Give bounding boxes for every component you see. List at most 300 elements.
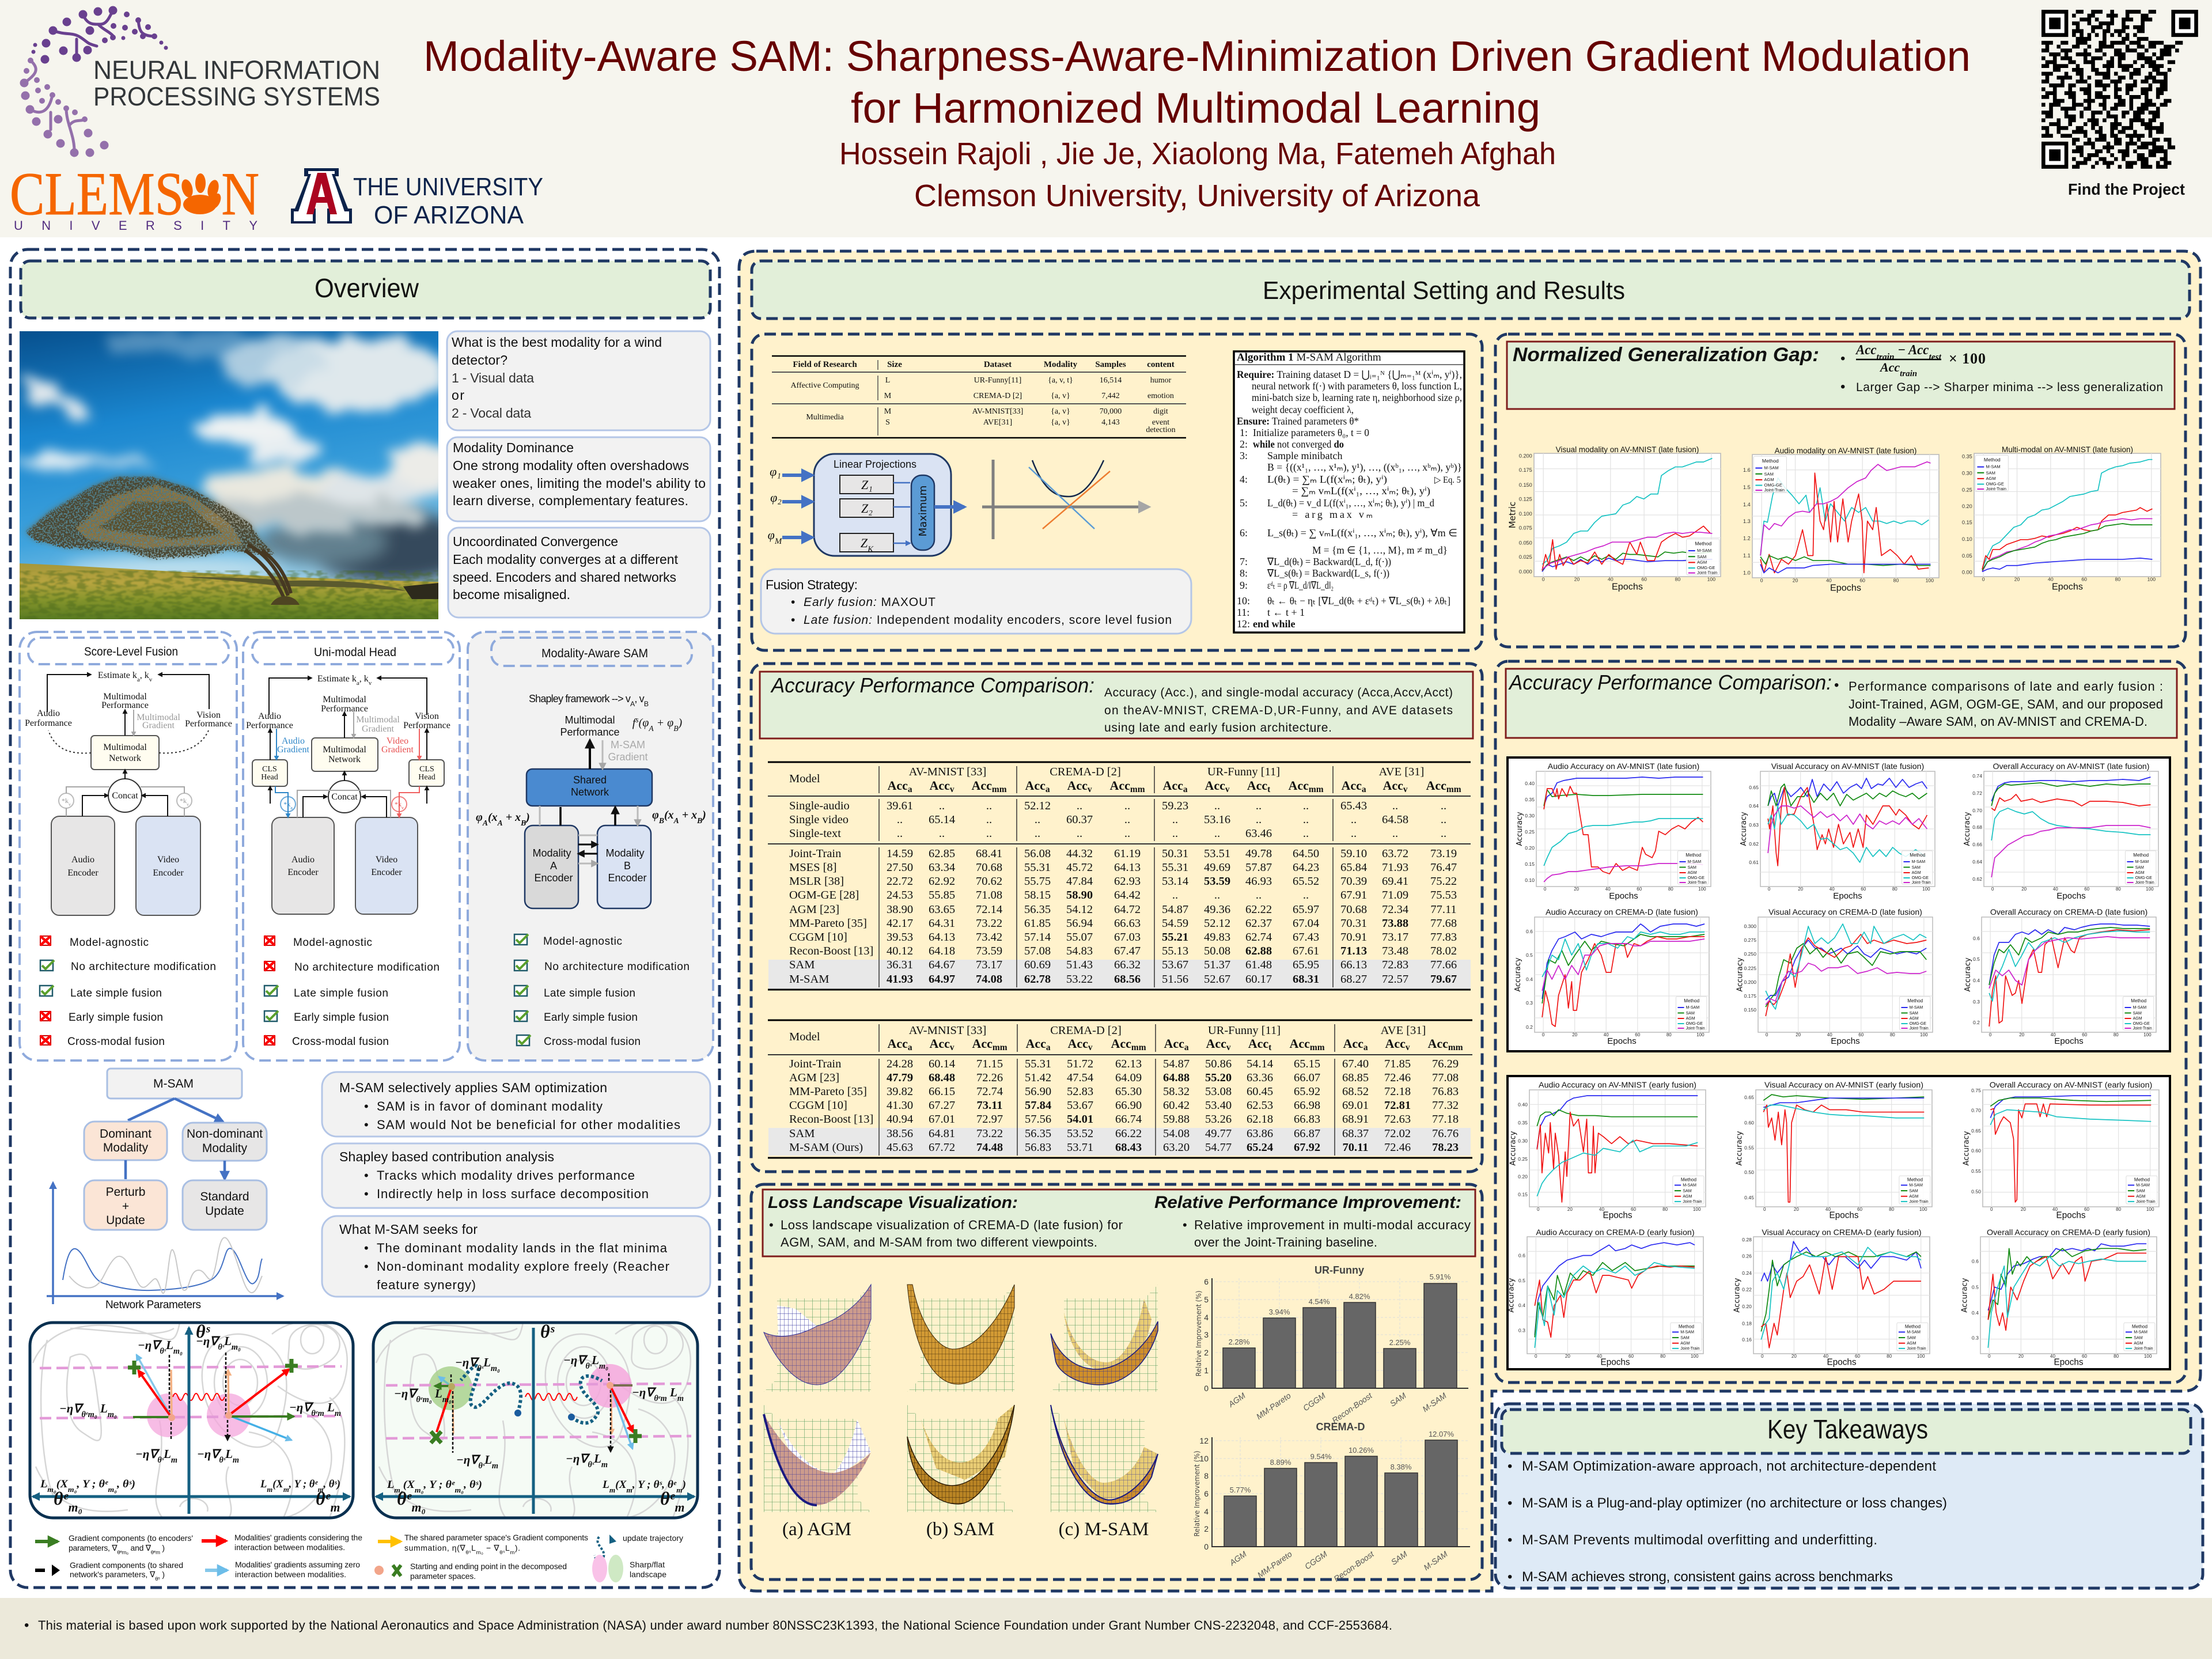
algorithm box: Algorithm 1 M-SAM Algorithm [1237,351,1381,363]
chart: visual accuracy CREMA-D late [1736,907,1933,1046]
chart: audio accuracy AV-MNIST late: 0.35 [1525,797,1535,802]
checklist: uni-modal head [264,936,440,1048]
logo: Clemson: CLEMSON [10,160,259,228]
table: early fusion accuracy: Acca [1343,1036,1368,1052]
green caption: Performance comparisons of late and early fusion : [1849,679,2163,694]
table: late fusion accuracy: Accmm [971,778,1007,794]
algorithm box: neural network f(·) with parameters θ, loss function L, [1252,380,1462,392]
dataset table: UR-Funny[11] [974,376,1021,385]
dataset table: 7,442 [1101,392,1120,400]
table: early fusion accuracy: 53.71 [1067,1141,1093,1154]
table: early fusion accuracy: 51.72 [1067,1058,1093,1070]
algorithm box: Sample minibatch [1267,450,1342,461]
table: early fusion accuracy: 65.92 [1294,1085,1320,1098]
table: late fusion accuracy: 46.93 [1245,875,1272,888]
algorithm box: Initialize parameters θ₀, t = 0 [1253,427,1369,438]
chart: visual accuracy CREMA-D late: Epochs [1831,1036,1860,1046]
dataset table: humor [1150,376,1172,385]
bar chart: CREMA-D: 5.77% [1230,1486,1251,1494]
chart: overall accuracy CREMA-D early: Epochs [2054,1357,2084,1367]
chart: visual accuracy CREMA-D early: Accuracy [1733,1278,1742,1313]
green caption: • [769,1218,774,1232]
table: early fusion accuracy: 52.83 [1067,1085,1093,1098]
diagram: linear projections maxout: ZK [861,536,874,554]
table: late fusion accuracy: 64.67 [929,959,955,971]
table: early fusion accuracy: 40.94 [887,1113,913,1126]
table: late fusion accuracy: 42.17 [887,917,913,930]
table: late fusion accuracy: Accv [1067,778,1092,794]
table: late fusion accuracy: AGM [23] [789,903,839,916]
green caption: Relative improvement in multi-modal accuracy [1194,1218,1471,1232]
table: late fusion accuracy: 56.94 [1066,917,1093,930]
chart: audio accuracy AV-MNIST late: 0.25 [1525,829,1535,835]
table: early fusion accuracy: Accmm [1111,1036,1146,1052]
diagram: linear projections maxout: φ₂ [770,490,782,505]
table: early fusion accuracy: 63.36 [1247,1071,1273,1084]
diagram: uni-modal head: Gradient [362,724,395,734]
table: late fusion accuracy: .. [1303,889,1309,902]
green caption: • [1183,1218,1187,1232]
bar chart: UR-Funny: Recon-Boost [1330,1391,1374,1425]
chart: audio accuracy AV-MNIST late: Accuracy [1516,812,1524,846]
diagram: score-level fusion: Multimodal [137,713,180,722]
chart: overall accuracy CREMA-D late: Accuracy [1964,957,1972,992]
chart: audio accuracy CREMA-D late: 0.2 [1526,1024,1533,1030]
diagram: SAM on both modalities: −η∇θˢLm [197,1447,239,1465]
green caption: AGM, SAM, and M-SAM from two different viewpoints. [781,1235,1097,1249]
chart: visual accuracy CREMA-D early: 0.28 [1742,1237,1752,1243]
dataset table: emotion [1147,392,1174,400]
chart: audio modality gap: 1.4 [1743,502,1751,507]
bar chart: UR-Funny: 3 [1204,1330,1209,1339]
dataset table: Modality [1044,360,1078,369]
table: late fusion accuracy: .. [986,813,992,826]
algorithm box: 8: [1240,567,1248,579]
legend: gradient diagram key: Gradient components (to shared [70,1560,183,1570]
checklist: modality-aware SAM [514,934,690,1048]
bar chart: UR-Funny: 4.82% [1349,1292,1370,1301]
table: early fusion accuracy: AGM [23] [789,1071,839,1084]
algorithm box: = ∑ₘ vₘL(f(xⁱ₁, …, xⁱₘ; θₜ), yⁱ) [1292,485,1430,497]
table: late fusion accuracy: .. [1392,800,1398,812]
table: early fusion accuracy: 56.35 [1025,1127,1051,1140]
table: late fusion accuracy: Accv [1205,778,1230,794]
algorithm box: 9: [1240,579,1248,591]
diagram: SAM on both modalities: Lm₀(Xm₀, Y ; θᵉm₀, θˢ) [40,1478,135,1493]
legend: gradient diagram key: landscape [630,1570,666,1579]
bar chart: CREMA-D: MM-Pareto [1256,1549,1294,1580]
diagram: score-level fusion [25,671,232,915]
chart: overall accuracy CREMA-D late: 0.3 [1973,999,1980,1005]
dataset table: {a, v} [1051,418,1070,427]
chart: visual accuracy CREMA-D late: 0.150 [1744,1007,1756,1013]
flowchart: M-SAM branching: Update [205,1205,244,1218]
panel title [252,638,453,664]
algorithm box: 10: [1237,595,1250,607]
affiliations: Clemson University, University of Arizona [914,179,1480,213]
flowchart: M-SAM branching: Modality [202,1142,248,1155]
chart: audio modality gap: Epochs [1830,583,1861,593]
table: early fusion accuracy: 76.83 [1432,1085,1459,1098]
diagram: M-SAM trajectories: Lm₀(Xm₀, Y ; θᵉm₀, θˢ) [387,1479,482,1494]
table: early fusion accuracy: 76.76 [1432,1127,1459,1140]
dataset table: 4,143 [1101,418,1120,427]
chart: visual modality gap: 0.150 [1519,482,1532,488]
text box: selective SAM: • [364,1118,369,1132]
table: late fusion accuracy: 44.32 [1066,847,1093,860]
table: late fusion accuracy: 62.85 [929,847,955,860]
green caption [1507,342,2175,409]
bar chart: CREMA-D: Recon-Boost [1332,1549,1376,1584]
table: early fusion accuracy: 49.77 [1205,1127,1232,1140]
chart: overall accuracy AV-MNIST late: 0.62 [1972,876,1982,882]
table: early fusion accuracy: 56.90 [1025,1085,1051,1098]
table: late fusion accuracy: 63.65 [929,903,955,916]
flowchart: M-SAM branching: M-SAM [153,1077,194,1090]
table: late fusion accuracy: 72.34 [1382,903,1408,916]
heading [752,261,2190,319]
chart: audio accuracy AV-MNIST early: 0.20 [1518,1173,1528,1179]
table: early fusion accuracy: MM-Pareto [35] [789,1085,867,1098]
text box: what M-SAM seeks [322,1216,710,1297]
table: late fusion accuracy: Acct [1247,778,1270,794]
table: late fusion accuracy: 40.12 [887,945,913,957]
text box: selective SAM: SAM would Not be beneficial for other modalities [377,1118,680,1132]
table: early fusion accuracy: 50.86 [1205,1058,1232,1070]
chart: audio accuracy AV-MNIST late: 0.15 [1525,861,1535,867]
table: late fusion accuracy: 58.15 [1024,889,1051,902]
table: late fusion accuracy: 47.84 [1066,875,1093,888]
table: early fusion accuracy: 77.32 [1432,1099,1459,1112]
chart: overall accuracy CREMA-D late: 0.4 [1973,978,1980,983]
table: late fusion accuracy: .. [1256,889,1262,902]
table: late fusion accuracy: 76.47 [1430,861,1457,874]
algorithm box: 5: [1240,497,1248,509]
header band [0,0,2212,237]
chart: visual modality gap: 0.100 [1519,511,1532,517]
table: early fusion accuracy: 73.22 [976,1127,1003,1140]
chart: visual accuracy AV-MNIST early: Accuracy [1735,1131,1744,1166]
bar chart: CREMA-D: 8 [1204,1471,1209,1480]
diagram: uni-modal head: Multimodal [323,745,366,755]
surface: SAM top [907,1285,1014,1392]
diagram: SAM on both modalities: θˢ [196,1321,211,1342]
table: early fusion accuracy: 57.84 [1025,1099,1051,1112]
table: late fusion accuracy: 73.19 [1430,847,1457,860]
dataset table: Multimedia [806,413,844,422]
table: early fusion accuracy: 77.08 [1432,1071,1459,1084]
footer note: This material is based upon work supported by the National Aeronautics and Space Administration (NASA) under award number 80NSSC23K1393, the National Science Foundation under Grant Number CNS-2232048, and CCF-2553684. [38,1618,1392,1633]
table: early fusion accuracy: 72.02 [1384,1127,1411,1140]
chart: audio accuracy AV-MNIST early: Epochs [1603,1210,1633,1220]
green caption: Joint-Trained, AGM, OGM-GE, SAM, and our proposed [1849,697,2163,711]
table: late fusion accuracy: 52.67 [1204,973,1230,986]
chart: audio accuracy CREMA-D late: 0.3 [1526,1000,1533,1006]
chart: audio accuracy CREMA-D early: 0.6 [1518,1253,1525,1259]
bar chart: UR-Funny: 2 [1204,1348,1209,1357]
diagram: SAM on both modalities [30,1321,353,1518]
text box: wind detector question: 2 - Vocal data [452,406,531,421]
chart: visual accuracy AV-MNIST late: 0.63 [1749,822,1759,828]
text box: modality dominance [447,437,710,521]
bar chart: UR-Funny: 5.91% [1430,1272,1451,1281]
logo: NeurIPS: NEURAL INFORMATION [93,55,380,85]
chart: visual accuracy AV-MNIST early: 0.60 [1744,1120,1754,1126]
text box: fusion strategy: • [791,613,795,627]
table: late fusion accuracy: 49.36 [1204,903,1230,916]
algorithm box: θₜ ← θₜ − ηₜ [∇L_d(θₜ + εᵈₜ) + ∇L_s(θₜ) + λθₜ] [1267,595,1450,607]
logo: NeurIPS: PROCESSING SYSTEMS [93,82,380,111]
table: early fusion accuracy: 66.15 [929,1085,955,1098]
bar chart: CREMA-D: 0 [1204,1542,1209,1551]
chart: overall accuracy AV-MNIST late: Epochs [2056,891,2086,901]
diagram: SAM on both modalities: θᵉm₀ [54,1488,82,1514]
table: early fusion accuracy: Accv [929,1036,955,1052]
chart: overall accuracy AV-MNIST early: 0.65 [1971,1128,1981,1134]
diagram: score-level fusion: Gradient [142,721,175,730]
chart: visual modality gap: 0.075 [1519,525,1532,531]
diagram: uni-modal head: Head [418,773,435,782]
diagram: linear projections maxout: Z₂ [861,501,873,516]
table: late fusion accuracy: .. [1172,813,1178,826]
algorithm box: 1: [1240,427,1248,438]
table: early fusion accuracy: M-SAM (Ours) [789,1141,863,1154]
table: late fusion accuracy: 60.69 [1024,959,1051,971]
dataset table: {a, v} [1051,407,1070,416]
flowchart: M-SAM branching: Dominant [100,1127,151,1141]
surface: AGM top [764,1285,871,1392]
legend: gradient diagram key: update trajectory [623,1533,683,1543]
flowchart: M-SAM branching: Modality [103,1141,149,1154]
checklist: modality-aware SAM: Cross-modal fusion [544,1036,641,1048]
chart: audio accuracy CREMA-D early: 0.3 [1518,1327,1525,1333]
chart: visual accuracy CREMA-D early: 0.20 [1742,1304,1752,1309]
chart: audio accuracy CREMA-D early: Epochs [1601,1357,1630,1367]
table: early fusion accuracy: 58.32 [1163,1085,1190,1098]
chart: audio accuracy AV-MNIST early: 0.35 [1518,1120,1528,1126]
diagram: score-level fusion: Performance [101,700,149,710]
diagram: M-SAM trajectories: θˢ [540,1321,555,1342]
table: early fusion accuracy: 60.14 [929,1058,955,1070]
chart: visual accuracy AV-MNIST late: Accuracy [1740,812,1748,846]
diagram: score-level fusion: Performance [185,719,232,729]
diagram: uni-modal head: Estimate ka, kv [317,674,372,687]
chart: overall accuracy CREMA-D late: Epochs [2054,1036,2084,1046]
table: late fusion accuracy: .. [1441,800,1446,812]
table: early fusion accuracy: 64.88 [1163,1071,1190,1084]
table: late fusion accuracy: 56.35 [1024,903,1051,916]
table: early fusion accuracy: 51.42 [1025,1071,1051,1084]
diagram: uni-modal head: Encoder [371,868,402,877]
chart: audio accuracy CREMA-D late: Epochs [1607,1036,1637,1046]
chart: overall accuracy CREMA-D late: Overall Accuracy on CREMA-D (late fusion) [1990,907,2147,916]
table: late fusion accuracy: 24.53 [887,889,913,902]
diagram: M-SAM network: B [624,860,631,872]
bar chart: CREMA-D: CREMA-D [1316,1421,1365,1433]
checklist: uni-modal head: Early simple fusion [294,1012,389,1024]
table: late fusion accuracy: 53.59 [1204,875,1230,888]
legend: gradient diagram key: Sharp/flat [630,1560,665,1569]
table: late fusion accuracy: .. [1351,827,1357,840]
bar chart: CREMA-D: 12 [1199,1436,1209,1445]
table: late fusion accuracy: 49.83 [1204,931,1230,944]
table: late fusion accuracy: 73.17 [976,959,1002,971]
table: late fusion accuracy: .. [986,827,992,840]
table: early fusion accuracy: 68.85 [1342,1071,1369,1084]
chart: overall accuracy AV-MNIST early [1962,1081,2159,1220]
table: late fusion accuracy: Recon-Boost [13] [789,945,873,957]
chart: audio accuracy CREMA-D early: 0.4 [1518,1302,1525,1308]
table: late fusion accuracy: 53.51 [1204,847,1230,860]
chart: audio accuracy AV-MNIST late: Audio Accuracy on AV-MNIST (late fusion) [1548,762,1699,771]
chart: audio accuracy AV-MNIST early: 0.15 [1518,1192,1528,1198]
dataset table: S [885,418,890,427]
table: late fusion accuracy: 39.53 [887,931,913,944]
QR code [2041,10,2198,169]
bar chart: UR-Funny: 4 [1204,1313,1209,1322]
table: early fusion accuracy: 68.37 [1342,1127,1369,1140]
table: early fusion accuracy: 57.56 [1025,1113,1051,1126]
table: late fusion accuracy: 74.08 [976,973,1002,986]
table: late fusion accuracy: 57.14 [1024,931,1051,944]
table: late fusion accuracy: 65.52 [1293,875,1319,888]
chart: loss curves over network parameters: Network Parameters [105,1299,201,1311]
table: late fusion accuracy: 38.90 [887,903,913,916]
table: early fusion accuracy: SAM [789,1127,815,1140]
legend: gradient diagram key: network's parameters, ∇θˢ ) [70,1570,165,1582]
table: late fusion accuracy: 65.43 [1340,800,1367,812]
chart: audio accuracy AV-MNIST late: 0.30 [1525,813,1535,819]
chart: overall accuracy AV-MNIST late: 0.66 [1972,842,1982,847]
table: early fusion accuracy: 72.81 [1384,1099,1411,1112]
table: early fusion accuracy: 62.13 [1115,1058,1142,1070]
chart: audio accuracy CREMA-D late: Accuracy [1514,957,1522,992]
text box: fusion strategy [761,569,1191,634]
green caption [763,1190,1475,1256]
table rules: early fusion: AVE [31] [1381,1024,1426,1037]
text box: Shapley analysis [322,1143,710,1208]
table: late fusion accuracy: 53.22 [1066,973,1093,986]
table: late fusion accuracy: 64.97 [929,973,955,986]
table: early fusion accuracy: 67.72 [929,1141,955,1154]
table: late fusion accuracy: 62.78 [1024,973,1051,986]
algorithm box: L(θₜ) = ∑ₘ L(f(xⁱₘ; θₜ), yⁱ) [1267,474,1387,486]
table rules: late fusion: AVE [31] [1379,766,1424,778]
diagram: uni-modal head: Performance [321,704,368,714]
table: late fusion accuracy: Single video [789,813,849,826]
table: early fusion accuracy: 63.20 [1163,1141,1190,1154]
diagram: M-SAM network: φB(xA + xB) [652,809,706,825]
chart: overall accuracy CREMA-D late: 0.2 [1973,1020,1980,1025]
table rules: early fusion: Model [789,1031,820,1043]
chart: visual accuracy AV-MNIST late: 0.64 [1749,803,1759,809]
table: late fusion accuracy: 68.41 [976,847,1002,860]
takeaway bullets: M-SAM achieves strong, consistent gains across benchmarks [1522,1569,1893,1585]
diagram: linear projections maxout: φM [768,528,783,546]
chart: visual accuracy AV-MNIST early: 0.45 [1744,1195,1754,1200]
green caption: Accuracy Performance Comparison: [770,673,1094,697]
algorithm box: 2: [1240,438,1248,450]
table: late fusion accuracy: 72.57 [1382,973,1408,986]
table: late fusion accuracy: 58.90 [1066,889,1093,902]
flowchart: M-SAM branching: Standard [200,1190,249,1203]
table: early fusion accuracy: 60.45 [1247,1085,1273,1098]
chart: visual accuracy CREMA-D late: Accuracy [1736,957,1745,992]
legend: gradient diagram key: The shared parameter space's Gradient components [404,1533,588,1542]
card: loss landscapes and relative improvement [751,1184,1482,1584]
text box: fusion strategy: Early fusion: MAXOUT [804,596,935,609]
table: early fusion accuracy [789,1036,1463,1154]
table: early fusion accuracy: Accv [1385,1036,1410,1052]
takeaway bullets: M-SAM Prevents multimodal overfitting and underfitting. [1522,1532,1877,1548]
table rules: late fusion: CREMA-D [2] [1050,766,1121,778]
table: late fusion accuracy: 77.68 [1430,917,1457,930]
table: early fusion accuracy: 41.30 [887,1099,913,1112]
surface: SAM bottom [907,1405,1014,1512]
table: late fusion accuracy: .. [1392,827,1398,840]
dataset table: AVE[31] [983,418,1012,427]
bar chart: UR-Funny: 3.94% [1269,1308,1290,1316]
green caption: Normalized Generalization Gap: [1513,344,1819,366]
green caption: Larger Gap --> Sharper minima --> less generalization [1856,381,2163,394]
table: late fusion accuracy: 73.42 [976,931,1002,944]
chart: audio accuracy CREMA-D late: 0.4 [1526,976,1533,982]
table: late fusion accuracy: 55.75 [1024,875,1051,888]
text box: fusion strategy: Fusion Strategy: [766,577,858,592]
diagram: uni-modal head: Vision [415,711,439,721]
table: late fusion accuracy: 66.32 [1114,959,1141,971]
dataset table: L [885,376,890,385]
table: late fusion accuracy: 52.12 [1024,800,1051,812]
diagram: score-level fusion: Vision [196,710,221,720]
chart: audio modality gap: 1.0 [1743,570,1751,576]
table: late fusion accuracy: 67.47 [1114,945,1141,957]
table: late fusion accuracy: Accmm [1288,778,1324,794]
dataset table [772,356,1186,438]
table: late fusion accuracy: 70.62 [976,875,1002,888]
table: late fusion accuracy: 71.08 [976,889,1002,902]
table: early fusion accuracy: 38.56 [887,1127,913,1140]
chart: overall accuracy AV-MNIST early: 0.60 [1971,1148,1981,1154]
table: late fusion accuracy: 60.37 [1066,813,1093,826]
table: late fusion accuracy: 64.23 [1293,861,1319,874]
green caption: using late and early fusion architecture. [1104,721,1332,734]
table: late fusion accuracy: 61.85 [1024,917,1051,930]
dataset table: detection [1146,426,1176,434]
dataset table: 70,000 [1100,407,1122,416]
bar chart: CREMA-D: 2 [1204,1524,1209,1533]
chart: audio accuracy CREMA-D early: 0.5 [1518,1278,1525,1283]
bar chart: CREMA-D: 4 [1204,1507,1209,1516]
table: late fusion accuracy: 66.63 [1114,917,1141,930]
algorithm box: L_s(θₜ) = ∑ vₘL(f(xⁱ₁, …, xⁱₘ; θₜ), yⁱ), ∀m ∈ [1267,527,1457,539]
chart: visual accuracy AV-MNIST early: 0.65 [1744,1094,1754,1100]
chart: visual accuracy CREMA-D late: Visual Accuracy on CREMA-D (late fusion) [1768,907,1922,916]
text box: selective SAM: M-SAM selectively applies SAM optimization [339,1080,607,1095]
dataset table: Field of Research [793,360,857,369]
diagram: score-level fusion: Audio [37,709,60,718]
chart: overall accuracy AV-MNIST late: 0.74 [1972,773,1982,779]
surface: M-SAM top [1051,1285,1158,1392]
table: early fusion accuracy: 68.91 [1342,1113,1369,1126]
algorithm box: ∇L_d(θₜ) = Backward(L_d, f(·)) [1267,556,1391,568]
table rules: late fusion: Model [789,772,820,785]
table: late fusion accuracy: 22.72 [887,875,913,888]
panel: uni-modal head [243,632,460,1060]
table: early fusion accuracy: Accv [1067,1036,1093,1052]
green caption: Acctrain − Acctest [1855,343,1941,362]
text box: what M-SAM seeks: Non-dominant modality explore freely (Reacher [377,1259,669,1274]
